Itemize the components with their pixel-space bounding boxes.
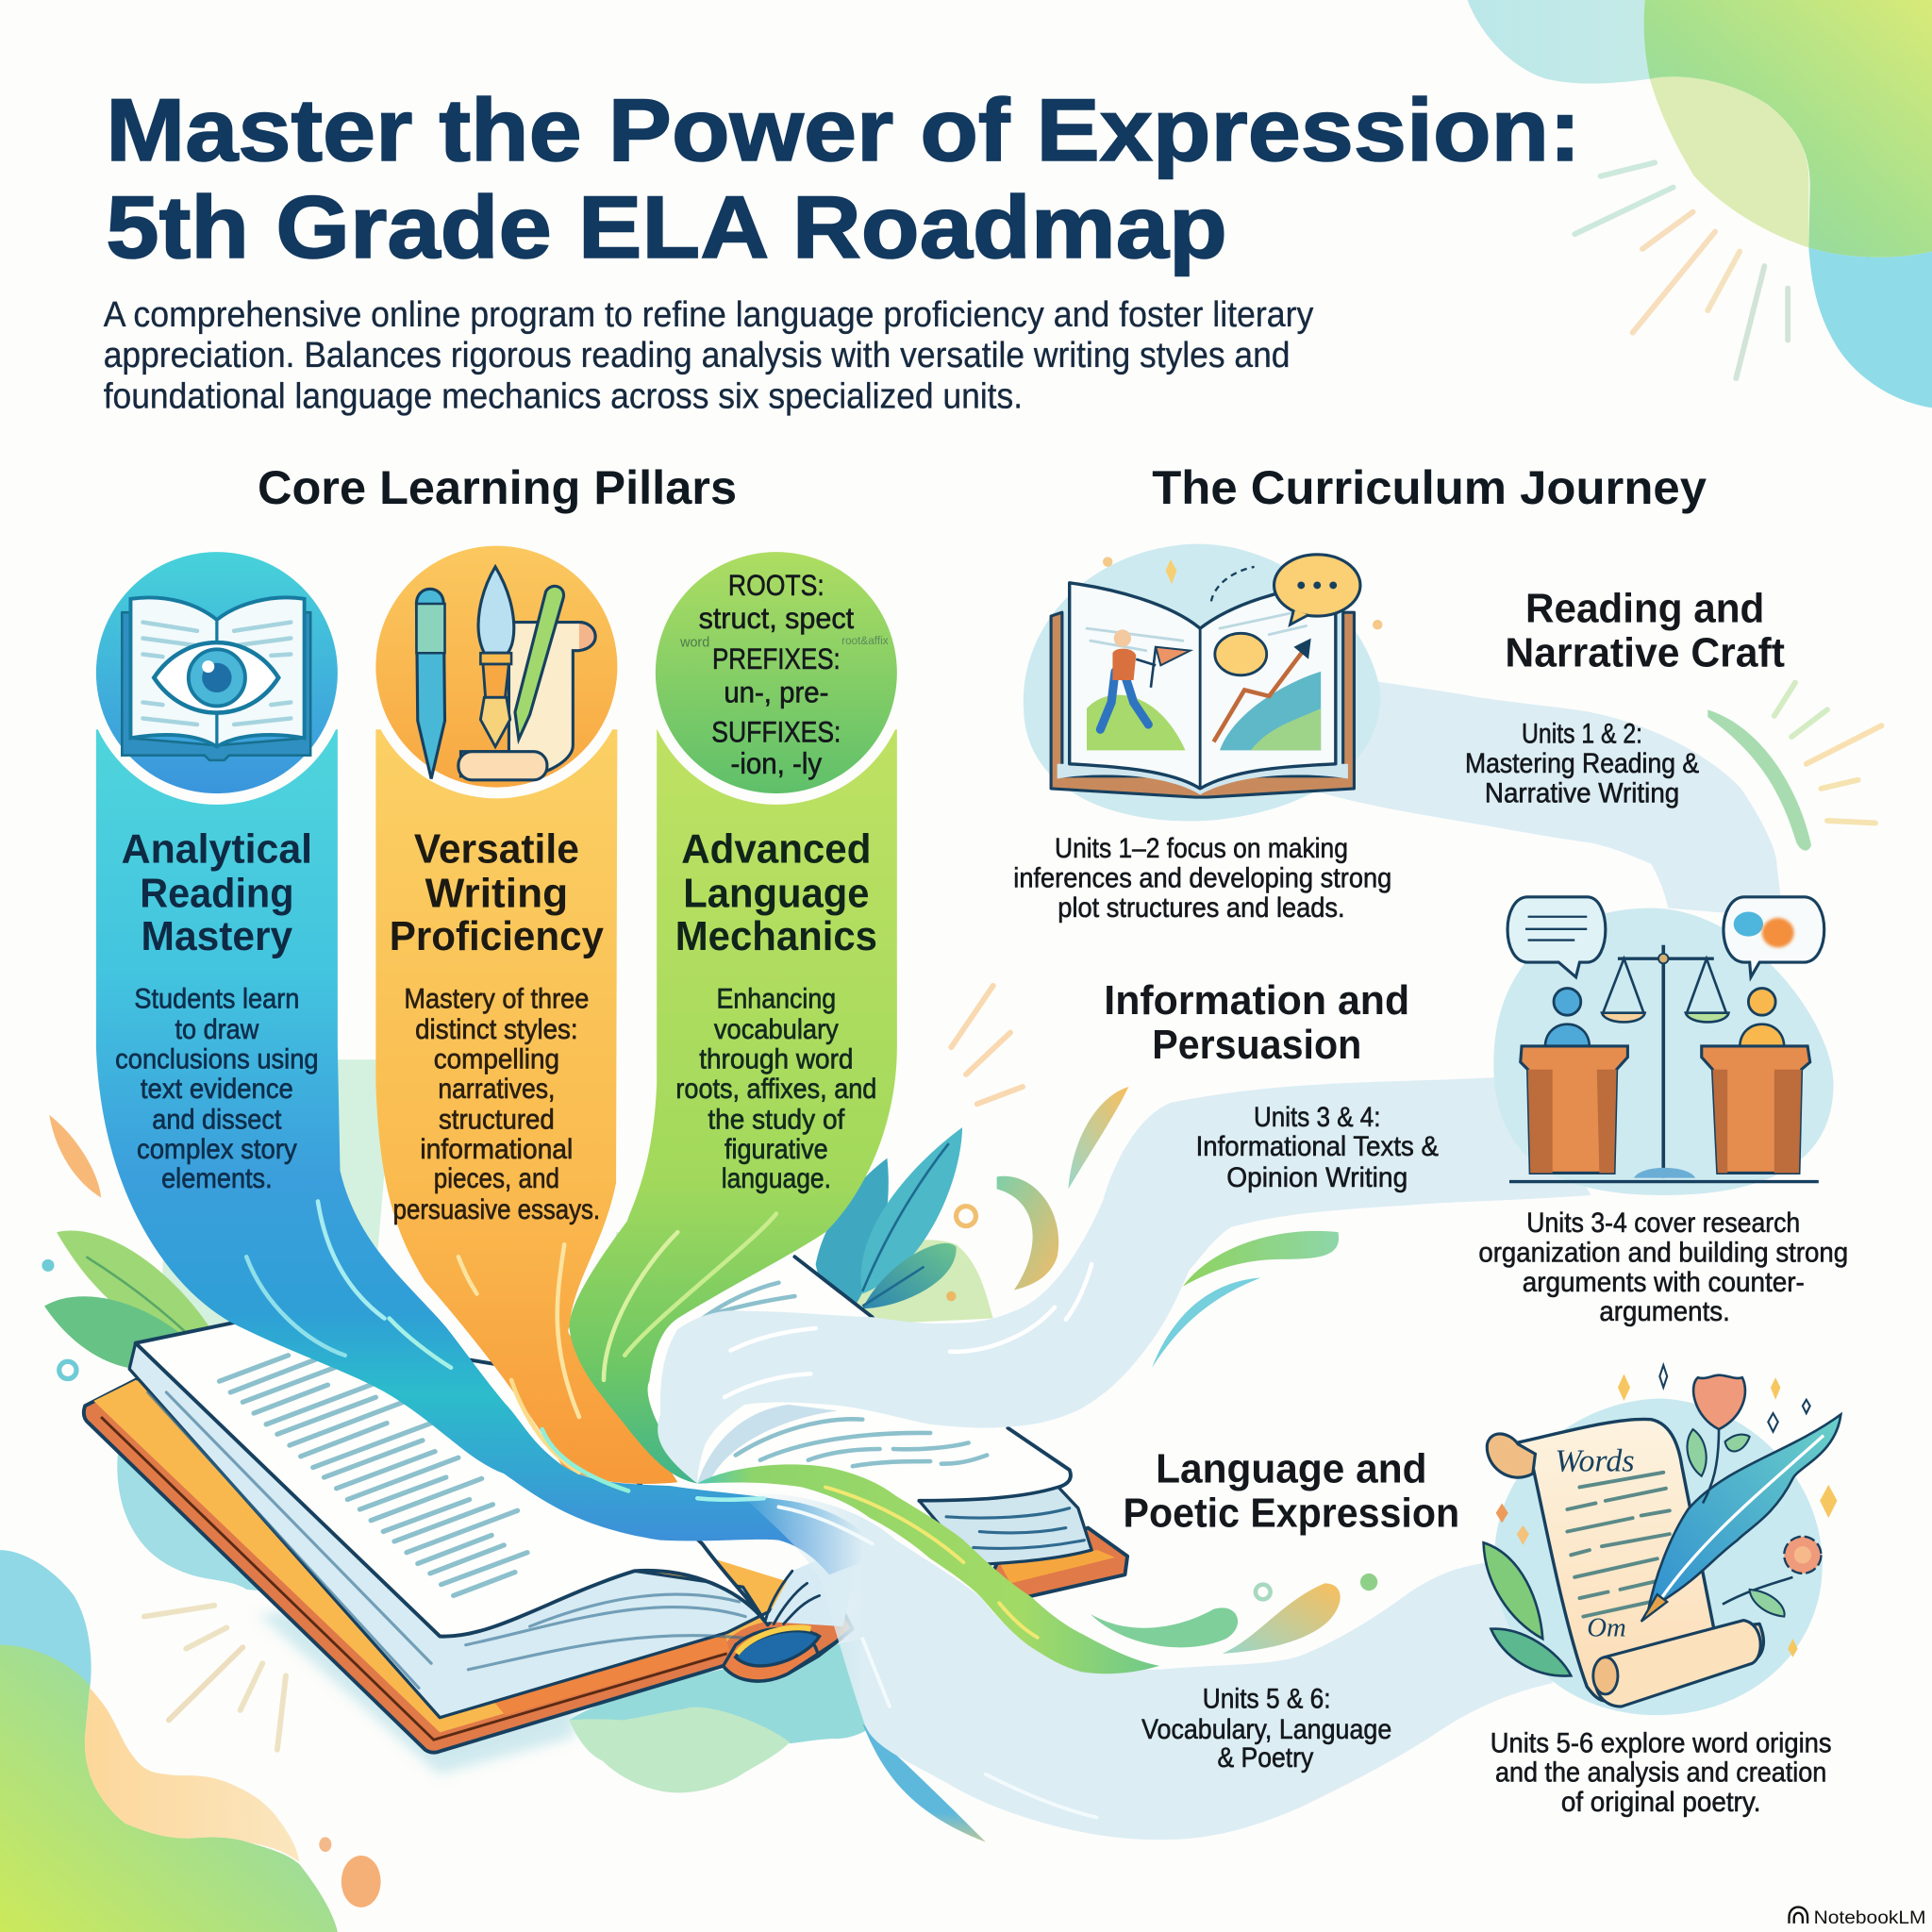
pillar text: versatile writing <box>393 983 600 1225</box>
description: units 5-6 <box>1491 1727 1832 1818</box>
left podium <box>1521 1046 1627 1173</box>
open book illustration <box>84 1257 1127 1753</box>
pillar title: advanced language mechanics: Advanced <box>681 826 871 872</box>
section heading: language and poetic expression: Poetic Expression <box>1124 1491 1459 1536</box>
page fan right of the fold <box>765 1541 862 1626</box>
lower stream highlights <box>778 1507 1096 1818</box>
intro paragraph <box>104 295 1313 416</box>
pillar title: analytical reading mastery: Mastery <box>142 914 292 959</box>
pillar text: analytical reading: text evidence <box>141 1074 293 1105</box>
pillar text: analytical reading: and dissect <box>152 1104 282 1135</box>
pillar circle: word parts: root&affix <box>841 635 889 647</box>
pillar text: versatile writing: distinct styles: <box>415 1014 578 1045</box>
pillar circle: word parts <box>656 552 897 793</box>
left cover <box>84 1380 853 1753</box>
unit label: units 3 and 4: Units 3 & 4: <box>1254 1102 1381 1133</box>
icon: open story book with hiker and chart <box>1024 544 1382 821</box>
decorative corner blobs: top right <box>1468 0 1932 408</box>
description: units 5-6: and the analysis and creation <box>1495 1757 1826 1789</box>
section heading: information and persuasion: Persuasion <box>1152 1023 1361 1068</box>
pillar text: analytical reading: conclusions using <box>115 1043 319 1074</box>
unit label: units 1 and 2 <box>1465 719 1699 808</box>
decorative leaves: left of book <box>44 1230 219 1370</box>
pillar text: versatile writing: compelling <box>434 1043 559 1074</box>
section heading: reading and narrative craft: Reading and <box>1525 587 1764 632</box>
description: units 1-2: Units 1–2 focus on making <box>1055 833 1348 864</box>
pillar title: advanced language mechanics <box>675 826 877 959</box>
left page block <box>129 1343 789 1718</box>
unit label: units 3 and 4: Opinion Writing <box>1226 1162 1407 1193</box>
description: units 5-6: of original poetry. <box>1561 1787 1760 1818</box>
scroll <box>460 623 595 776</box>
pillar text: versatile writing: persuasive essays. <box>393 1194 600 1225</box>
decorative corner blobs: bottom left <box>0 1550 381 1932</box>
description: units 1-2 <box>1013 833 1391 924</box>
arc swoosh beside units 1 and 2 <box>1707 709 1811 851</box>
pillar circle: word parts: -ion, -ly <box>731 747 822 780</box>
bottom roll <box>1594 1621 1760 1707</box>
pillar text: advanced language: through word <box>699 1043 853 1074</box>
pillar title: versatile writing proficiency: Proficiency <box>390 914 604 959</box>
ribbon path: units 5 and 6 band joined with book stream <box>740 1493 1553 1840</box>
fountain pen <box>478 567 514 653</box>
left speech bubble <box>1507 897 1606 977</box>
ballpoint pen <box>416 589 445 778</box>
intro paragraph: foundational language mechanics across six specialized units. <box>104 376 1023 416</box>
pillar circle: word parts: SUFFIXES: <box>711 715 841 748</box>
pillar text: analytical reading: complex story <box>137 1134 297 1165</box>
pencil <box>515 586 564 740</box>
light stream flowing across the book to information band <box>658 1075 1591 1484</box>
speech bubble <box>1274 555 1360 616</box>
pillar text: advanced language: the study of <box>708 1104 845 1135</box>
spine medallion <box>724 1629 842 1681</box>
pillar text: advanced language: figurative <box>724 1134 828 1165</box>
page lines <box>1087 610 1306 651</box>
left page <box>136 1322 765 1637</box>
pillar text: versatile writing: Mastery of three <box>404 983 589 1014</box>
pillar text: analytical reading: to draw <box>175 1014 259 1045</box>
pillar circle: word parts: struct, spect <box>699 602 854 635</box>
pillar title: analytical reading mastery: Analytical <box>122 826 312 872</box>
unit label: units 1 and 2: Units 1 & 2: <box>1522 719 1642 750</box>
green ribbon running to lower right <box>697 1464 1159 1674</box>
pillar text: versatile writing: narratives, <box>438 1074 555 1105</box>
section heading: language and poetic expression: Language and <box>1156 1446 1426 1491</box>
unit label: units 3 and 4 <box>1196 1102 1439 1193</box>
right speech bubble <box>1724 897 1824 977</box>
unit label: units 5 and 6: & Poetry <box>1217 1742 1314 1774</box>
title <box>106 80 1581 276</box>
section heading: reading and narrative craft <box>1505 587 1785 676</box>
icon: scroll, quill and flowers <box>1484 1365 1840 1715</box>
pillar circle: word parts: ROOTS: <box>728 569 824 602</box>
pillar text: advanced language: vocabulary <box>714 1014 839 1045</box>
white rings separating circles from ribbons <box>85 535 908 805</box>
icon: debate podiums and scales <box>1493 897 1834 1195</box>
pillar: analytical reading (blue ribbon) <box>96 729 887 1574</box>
unit label: units 3 and 4: Informational Texts & <box>1196 1131 1439 1162</box>
pillar text: advanced language: roots, affixes, and <box>675 1074 876 1105</box>
hiker scene <box>1087 695 1185 750</box>
pillar text: advanced language: Enhancing <box>717 983 836 1014</box>
flowers <box>1693 1375 1745 1429</box>
pillar circle: pens and scroll icon <box>375 546 617 788</box>
sparkles <box>1618 1374 1630 1401</box>
handwritten words: Words <box>1555 1444 1635 1479</box>
parchment <box>1510 1419 1763 1702</box>
right page block <box>919 1487 1091 1565</box>
description: units 1-2: inferences and developing strong <box>1013 862 1391 893</box>
description: units 3-4: Units 3-4 cover research <box>1526 1208 1800 1239</box>
pillar text: advanced language <box>675 983 876 1194</box>
heading: core learning pillars: Core Learning Pillars <box>258 461 737 514</box>
pillar title: advanced language mechanics: Mechanics <box>675 914 877 959</box>
blue stream tail <box>862 1724 986 1842</box>
pillar title: versatile writing proficiency: Versatile <box>414 826 579 872</box>
right cover <box>986 1528 1127 1597</box>
stream highlights <box>724 1264 1091 1397</box>
pillar title: versatile writing proficiency <box>390 826 604 959</box>
pillar title: analytical reading mastery: Reading <box>140 871 294 916</box>
sun rays: top right <box>1574 162 1788 378</box>
description: units 5-6: Units 5-6 explore word origins <box>1491 1727 1832 1758</box>
section heading: information and persuasion <box>1104 978 1409 1068</box>
unit label: units 1 and 2: Narrative Writing <box>1485 777 1679 808</box>
feather <box>1647 1414 1840 1614</box>
ribbon path: units 1 and 2 band <box>1306 672 1783 918</box>
right page text lines and shading <box>697 1405 838 1484</box>
pillar text: analytical reading: Students learn <box>134 983 299 1014</box>
intro paragraph: A comprehensive online program to refine language proficiency and foster literary <box>104 295 1313 335</box>
unit label: units 5 and 6 <box>1141 1683 1391 1774</box>
description: units 1-2: plot structures and leads. <box>1058 892 1345 924</box>
description: units 3-4: arguments with counter- <box>1523 1267 1805 1298</box>
section heading: information and persuasion: Information and <box>1104 978 1409 1024</box>
section heading: reading and narrative craft: Narrative Craft <box>1505 631 1785 676</box>
soft blobs behind the open book <box>117 1059 993 1792</box>
scales <box>1662 945 1665 1178</box>
pillar: versatile writing (orange ribbon) <box>375 729 677 1484</box>
speakers <box>1554 989 1581 1015</box>
pillar text: analytical reading: elements. <box>161 1163 273 1194</box>
pillar: advanced language (green ribbon) <box>569 729 897 1484</box>
pillar title: versatile writing proficiency: Writing <box>425 871 568 916</box>
title: Master the Power of Expression: <box>106 80 1581 179</box>
unit label: units 1 and 2: Mastering Reading & <box>1465 748 1699 779</box>
swooshes and accent marks <box>42 1087 1377 1654</box>
description: units 3-4 <box>1478 1208 1848 1327</box>
pillar circle: book and eye icon <box>96 552 338 793</box>
pillar circle: word parts: PREFIXES: <box>712 642 841 675</box>
pillar circle: word parts: un-, pre- <box>724 675 828 708</box>
ribbon highlights <box>246 1201 776 1500</box>
heading: curriculum journey: The Curriculum Journey <box>1152 461 1707 514</box>
title: 5th Grade ELA Roadmap <box>106 177 1227 276</box>
pillar text: versatile writing: structured <box>439 1104 555 1135</box>
pillar title: analytical reading mastery <box>122 826 312 959</box>
decorative leaves: right of book <box>816 1127 962 1308</box>
pillar text: advanced language: language. <box>722 1163 831 1194</box>
right podium <box>1702 1046 1810 1173</box>
pillar text: analytical reading <box>115 983 319 1194</box>
pillar text: versatile writing: informational <box>420 1134 573 1165</box>
unit label: units 5 and 6: Units 5 & 6: <box>1203 1683 1331 1714</box>
ribbon highlights: yellow <box>825 1487 1038 1638</box>
leaves <box>1484 1542 1542 1639</box>
intro paragraph: appreciation. Balances rigorous reading analysis with versatile writing styles and <box>104 336 1291 375</box>
pillar title: advanced language mechanics: Language <box>683 871 869 916</box>
top roll <box>1487 1434 1535 1477</box>
notebooklm watermark: NotebookLM <box>1814 1907 1925 1928</box>
unit label: units 5 and 6: Vocabulary, Language <box>1141 1714 1391 1745</box>
right page <box>616 1257 1073 1501</box>
section heading: language and poetic expression <box>1124 1446 1459 1536</box>
chart arrow <box>1214 647 1306 741</box>
description: units 3-4: organization and building strong <box>1478 1237 1848 1268</box>
accent rays beside pillars <box>144 683 1881 1750</box>
icon: scroll, quill and flowers: Om <box>1587 1613 1626 1643</box>
left page text lines <box>219 1356 527 1595</box>
description: units 3-4: arguments. <box>1599 1296 1730 1327</box>
pillar circle: word parts: word <box>679 636 709 651</box>
pillar text: versatile writing: pieces, and <box>434 1163 559 1194</box>
